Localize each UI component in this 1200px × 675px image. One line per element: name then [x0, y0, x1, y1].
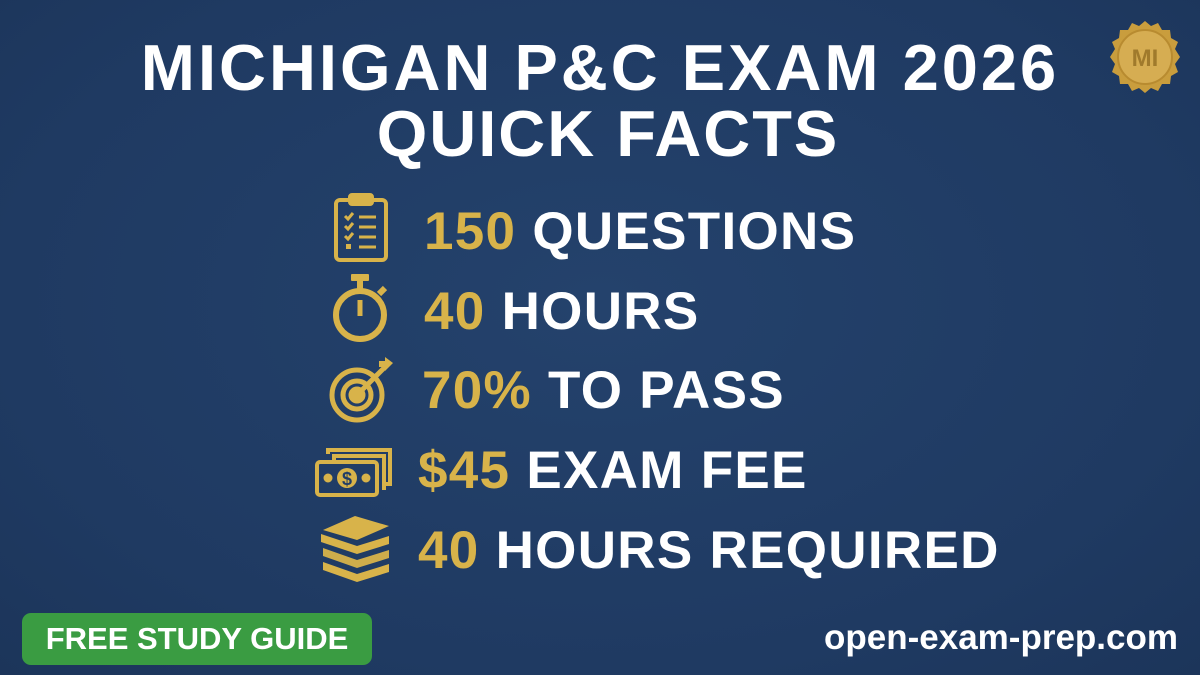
icon: clipboard [334, 193, 388, 262]
badge: MI seal [1110, 21, 1180, 93]
icon: money [315, 448, 392, 497]
button: free study guide: FREE STUDY GUIDE [46, 621, 348, 656]
icon: books [321, 516, 389, 582]
title [141, 31, 1059, 170]
button: free study guide [22, 613, 372, 665]
stat: hours: 40 HOURS [424, 282, 700, 341]
title: QUICK FACTS [377, 97, 839, 170]
stat: required: 40 HOURS REQUIRED [418, 521, 1000, 580]
icon: target [330, 357, 393, 422]
stat: questions: 150 QUESTIONS [424, 202, 856, 261]
stat: pass: 70% TO PASS [422, 361, 785, 420]
icon: money: $ [342, 469, 352, 489]
badge: MI seal: MI [1132, 45, 1158, 72]
icon: stopwatch [333, 274, 387, 342]
title: MICHIGAN P&C EXAM 2026 [141, 31, 1059, 104]
url: open-exam-prep.com [824, 618, 1178, 657]
stat: fee: $45 EXAM FEE [418, 441, 808, 500]
